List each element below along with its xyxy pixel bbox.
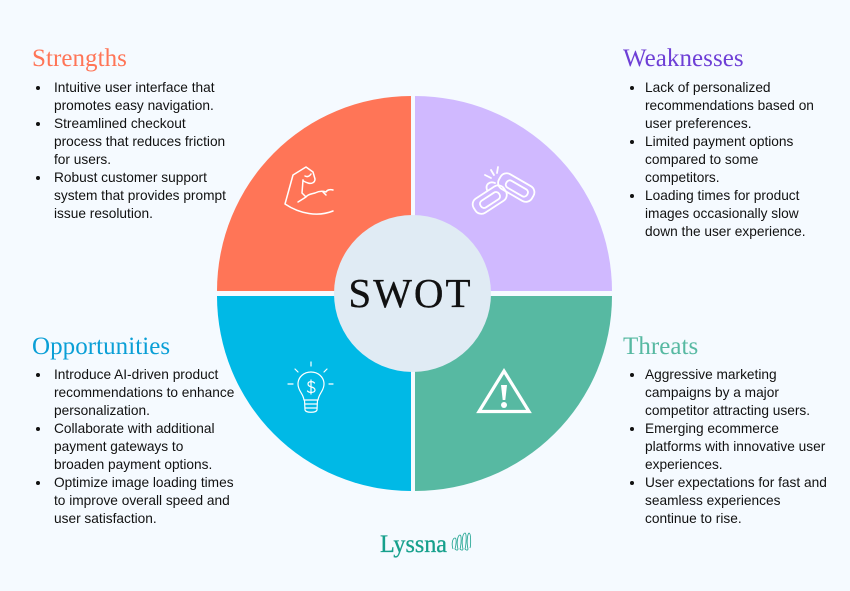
bullet list: threats: continue to rise. [645, 511, 742, 526]
bullet list: threats: competitor attracting users. [645, 403, 810, 418]
icon: flexed arm [285, 167, 333, 214]
bullet list: threats: User expectations for fast and [645, 475, 827, 490]
bullet list: opportunities: user satisfaction. [54, 511, 157, 526]
bullet list: opportunities: Collaborate with additional [54, 421, 215, 436]
panel: strengths [32, 45, 226, 221]
quadrant: opportunities [217, 296, 411, 491]
bullet list: threats: Emerging ecommerce [645, 421, 779, 436]
bullet list: opportunities: recommendations to enhance [54, 385, 234, 400]
heading: strengths: Strengths [32, 45, 127, 72]
bullet list: strengths: issue resolution. [54, 206, 153, 221]
bullet list: threats [630, 367, 827, 526]
quadrant: strengths [217, 96, 411, 291]
bullet list: threats: experiences. [645, 457, 723, 472]
bullet list: weaknesses: Limited payment options [645, 134, 793, 149]
bullet list: weaknesses [630, 80, 814, 239]
bullet list: strengths: process that reduces friction [54, 134, 225, 149]
bullet list: opportunities: Introduce AI-driven product [54, 367, 218, 382]
panel: threats [623, 333, 827, 526]
bullet list: weaknesses: down the user experience. [645, 224, 806, 239]
bullet list: threats: seamless experiences [645, 493, 780, 508]
logo: Lyssna: Lyssna [380, 531, 447, 558]
bullet list: strengths: system that provides prompt [54, 188, 226, 203]
bullet list: strengths: Intuitive user interface that [54, 80, 215, 95]
bullet list: strengths: Streamlined checkout [54, 116, 186, 131]
panel: opportunities [32, 333, 234, 526]
bullet list: strengths: for users. [54, 152, 111, 167]
quadrant: threats [415, 296, 612, 491]
icon: warning triangle [479, 371, 529, 412]
bullet list: opportunities: to improve overall speed and [54, 493, 230, 508]
heading: opportunities: Opportunities [32, 333, 170, 360]
center circle [334, 215, 491, 372]
bullet list: opportunities: broaden payment options. [54, 457, 212, 472]
bullet list: weaknesses: Lack of personalized [645, 80, 771, 95]
bullet list: threats: platforms with innovative user [645, 439, 825, 454]
bullet list: opportunities: Optimize image loading times [54, 475, 234, 490]
bullet list: weaknesses: images occasionally slow [645, 206, 799, 221]
bullet list: threats: campaigns by a major [645, 385, 779, 400]
heading: weaknesses: Weaknesses [623, 45, 744, 72]
bullet list: strengths: promotes easy navigation. [54, 98, 214, 113]
bullet list: weaknesses: user preferences. [645, 116, 752, 131]
panel: weaknesses [623, 45, 814, 239]
bullet list: threats: Aggressive marketing [645, 367, 777, 382]
icon: broken chain [470, 167, 537, 217]
bullet list: weaknesses: recommendations based on [645, 98, 814, 113]
bullet list: weaknesses: Loading times for product [645, 188, 799, 203]
bullet list: weaknesses: compared to some [645, 152, 758, 167]
icon: light bulb with dollar [288, 362, 333, 412]
bullet list: opportunities [36, 367, 234, 526]
quadrant: weaknesses [415, 96, 612, 291]
bullet list: opportunities: personalization. [54, 403, 150, 418]
bullet list: weaknesses: competitors. [645, 170, 720, 185]
bullet list: strengths: Robust customer support [54, 170, 207, 185]
bullet list: opportunities: payment gateways to [54, 439, 183, 454]
title: SWOT: SWOT [348, 270, 473, 316]
heading: threats: Threats [623, 333, 698, 360]
bullet list: strengths [36, 80, 226, 221]
